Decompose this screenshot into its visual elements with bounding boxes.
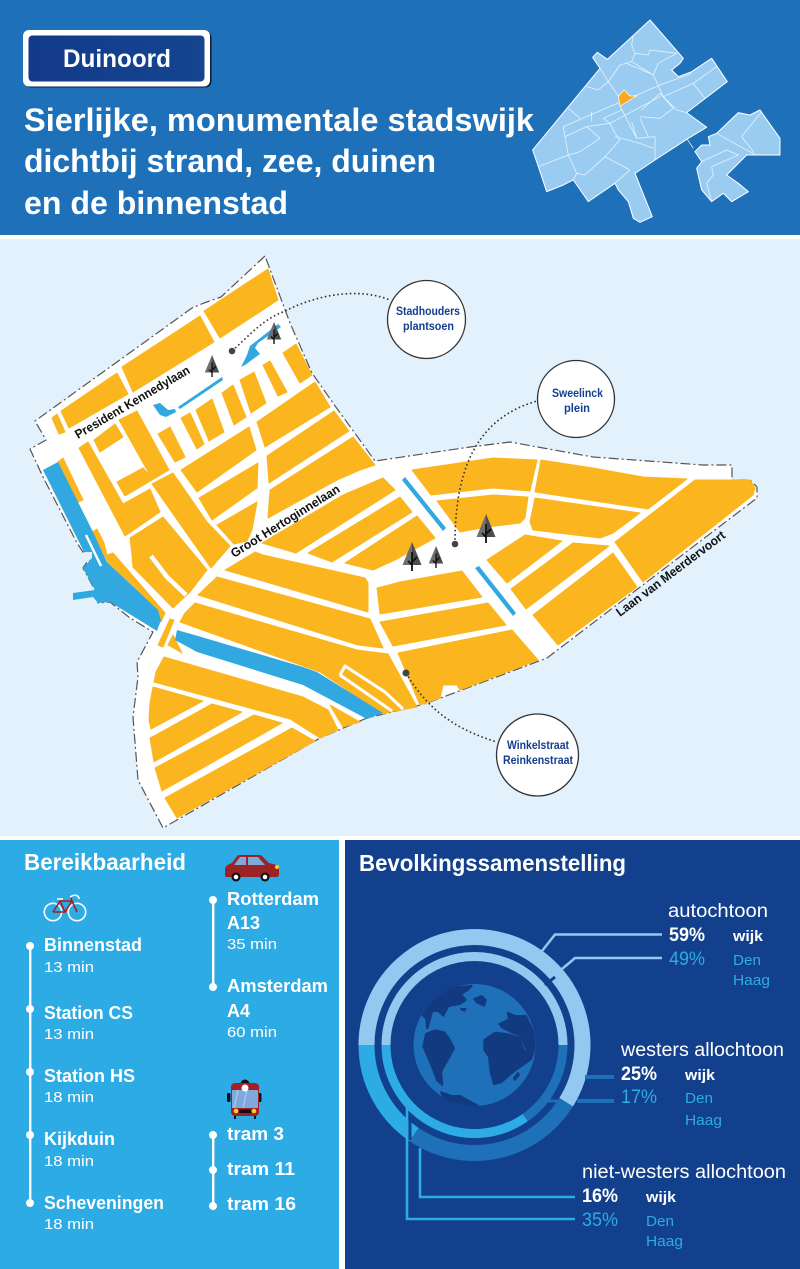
- legend: westers allochtoon: [620, 1040, 784, 1129]
- legend: westers allochtoon: westers allochtoon: [620, 1040, 784, 1061]
- car destinations: 35 min: [227, 936, 277, 953]
- road label: Laan van Meerdervoort: Laan van Meerdervoort: [613, 528, 729, 619]
- legend: autochtoon: [668, 901, 770, 989]
- legend: westers allochtoon: wijk: [684, 1067, 716, 1084]
- tram lines: tram 16: [227, 1193, 296, 1214]
- callout: Stadhouders plantsoen: [388, 280, 466, 358]
- tree: [205, 355, 219, 377]
- legend: niet-westers allochtoon: Haag: [646, 1233, 683, 1250]
- canals and water: [43, 324, 516, 719]
- cycling destinations: Station CS: [44, 1002, 133, 1023]
- district name badge: [23, 30, 212, 88]
- panel: header: [0, 0, 800, 235]
- callout: Sweelinck plein: plein: [564, 401, 590, 415]
- cycling destinations: Kijkduin: [44, 1128, 115, 1149]
- legend: autochtoon: wijk: [732, 928, 764, 945]
- icon: tram: [227, 1080, 262, 1119]
- tree: [476, 514, 496, 543]
- legend: niet-westers allochtoon: niet-westers allochtoon: [582, 1162, 786, 1183]
- cycling destinations: [44, 934, 164, 1233]
- tree: [402, 542, 422, 571]
- road label: Groot Hertoginnelaan: Groot Hertoginnelaan: [228, 482, 342, 561]
- legend: westers allochtoon: Den: [685, 1090, 713, 1107]
- leader lines: autochtoon: [542, 934, 662, 985]
- callout: Stadhouders plantsoen: plantsoen: [403, 319, 454, 333]
- leader lines: westers allochtoon: [548, 1077, 614, 1101]
- legend: westers allochtoon: 17%: [621, 1087, 657, 1108]
- locator map of Den Haag: [533, 20, 780, 222]
- title: Sierlijke, monumentale stadswijk: [24, 102, 534, 138]
- panel: neighbourhood map: [0, 239, 800, 836]
- leader lines: niet-westers allochtoon: [407, 1107, 575, 1219]
- tram lines: [227, 1123, 296, 1214]
- cycling destinations: 13 min: [44, 959, 94, 976]
- callout: Winkelstraat Reinkenstraat: [496, 714, 578, 796]
- legend: niet-westers allochtoon: 35%: [582, 1210, 618, 1231]
- legend: autochtoon: Haag: [733, 972, 770, 989]
- car destinations: 60 min: [227, 1024, 277, 1041]
- car destinations: A13: [227, 912, 260, 933]
- car destinations: Amsterdam: [227, 975, 328, 996]
- title: dichtbij strand, zee, duinen: [24, 143, 436, 179]
- callout: Winkelstraat Reinkenstraat: Reinkenstraat: [503, 753, 573, 767]
- legend: niet-westers allochtoon: Den: [646, 1213, 674, 1230]
- legend: autochtoon: autochtoon: [668, 901, 768, 922]
- dotted callout lines: [232, 294, 537, 742]
- panel: Bereikbaarheid: [0, 840, 339, 1269]
- road label: President Kennedylaan: President Kennedylaan: [72, 363, 192, 442]
- icon: car: [225, 855, 279, 882]
- car destinations: Rotterdam: [227, 888, 319, 909]
- donut chart: outer ring (wijk): [366, 937, 582, 1153]
- heading: Bereikbaarheid: [24, 849, 186, 875]
- minor white roads: [151, 556, 403, 711]
- legend: autochtoon: Den: [733, 952, 761, 969]
- legend: autochtoon: 59%: [669, 925, 705, 946]
- callout: Stadhouders plantsoen: Stadhouders: [396, 304, 460, 318]
- legend: niet-westers allochtoon: 16%: [582, 1186, 618, 1207]
- icon: bicycle: [44, 895, 86, 921]
- map base with boundary: [30, 256, 757, 828]
- callout: Sweelinck plein: Sweelinck: [552, 386, 603, 400]
- tram route line: [209, 1131, 217, 1210]
- legend: niet-westers allochtoon: wijk: [645, 1189, 677, 1206]
- car destinations: A4: [227, 1000, 251, 1021]
- cycling destinations: Station HS: [44, 1065, 135, 1086]
- tram lines: tram 11: [227, 1158, 295, 1179]
- car destinations: [227, 888, 328, 1041]
- legend: autochtoon: 49%: [669, 949, 705, 970]
- tree: [267, 322, 281, 344]
- legend: westers allochtoon: Haag: [685, 1112, 722, 1129]
- building blocks: [52, 269, 755, 818]
- cycling route line: [26, 942, 34, 1207]
- title: [24, 102, 534, 221]
- cycling destinations: Scheveningen: [44, 1192, 164, 1213]
- callout: Winkelstraat Reinkenstraat: Winkelstraat: [507, 738, 569, 752]
- donut chart: inner ring (Den Haag): [386, 957, 563, 1134]
- highlighted district: [618, 90, 637, 106]
- callout: Sweelinck plein: [538, 360, 614, 438]
- title: en de binnenstad: [24, 185, 288, 221]
- district name badge: Duinoord: [63, 45, 171, 73]
- cycling destinations: 18 min: [44, 1089, 94, 1106]
- cycling destinations: 18 min: [44, 1153, 94, 1170]
- callout dots: [229, 348, 458, 676]
- tree: [429, 546, 443, 568]
- heading: Bevolkingssamenstelling: [359, 850, 626, 876]
- panel: Bevolkingssamenstelling: [345, 840, 800, 1269]
- cycling destinations: 18 min: [44, 1216, 94, 1233]
- car route line: [209, 896, 217, 991]
- legend: niet-westers allochtoon: [582, 1162, 786, 1250]
- cycling destinations: 13 min: [44, 1026, 94, 1043]
- tram lines: tram 3: [227, 1123, 284, 1144]
- legend: westers allochtoon: 25%: [621, 1064, 657, 1085]
- cycling destinations: Binnenstad: [44, 934, 142, 955]
- globe: [414, 984, 536, 1106]
